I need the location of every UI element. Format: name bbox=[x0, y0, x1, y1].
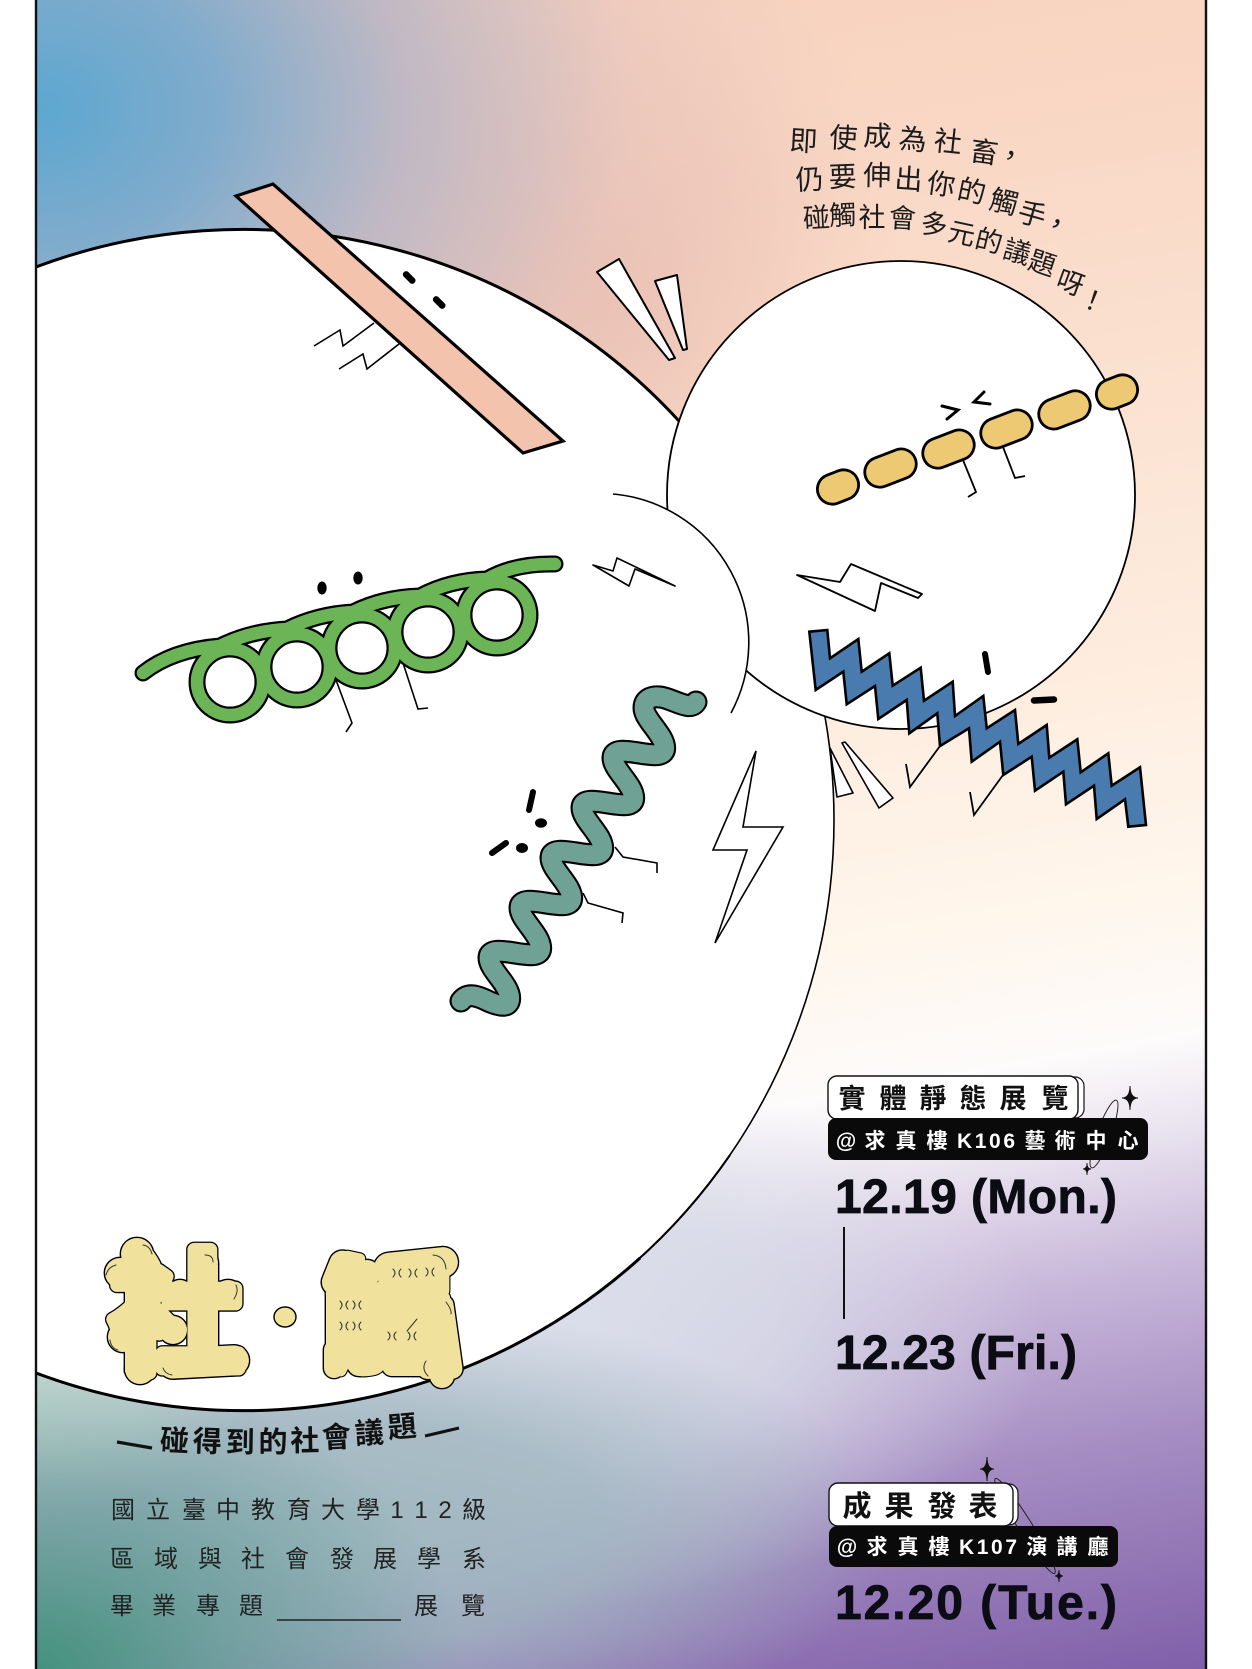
exhibition heading box bbox=[828, 1076, 1084, 1119]
yellow sausages bbox=[813, 370, 1142, 509]
presentation date: 12.20 (Tue.) bbox=[835, 1577, 1117, 1630]
green coil bbox=[143, 564, 555, 715]
physical exhibition block bbox=[828, 1076, 1148, 1380]
exhibition venue box: K106 bbox=[957, 1130, 1015, 1153]
presentation block bbox=[829, 1457, 1118, 1630]
pink bar eyes bbox=[402, 270, 447, 310]
organiser line 2: 區域與社會發展學系 bbox=[110, 1546, 486, 1573]
organiser blank line bbox=[277, 1619, 401, 1621]
exhibition venue box bbox=[828, 1118, 1148, 1160]
teal legs bbox=[583, 847, 657, 923]
presentation heading box: 成果發表 bbox=[842, 1490, 998, 1523]
blue zigzag character bbox=[809, 630, 1146, 827]
exhibition venue box: 藝術中心 bbox=[1024, 1130, 1138, 1153]
blue zigzag bbox=[809, 630, 1146, 827]
organiser line 1: 國立臺中教育大學112級 bbox=[111, 1497, 486, 1524]
blue eyes bbox=[985, 654, 1054, 700]
subtitle right dash bbox=[425, 1428, 459, 1436]
green coil character bbox=[143, 564, 555, 732]
organiser line 3 end: 展覽 bbox=[414, 1593, 485, 1620]
teal wave bbox=[461, 697, 696, 1005]
blue legs bbox=[906, 746, 1003, 815]
title character 觸: 觸 bbox=[329, 1250, 451, 1386]
pink bar character bbox=[236, 184, 563, 453]
title character 觸: 觸 bbox=[329, 1250, 451, 1386]
right white circle bbox=[667, 261, 1135, 729]
date start: 12.19 (Mon.) bbox=[835, 1171, 1117, 1224]
yellow eyes bbox=[942, 392, 990, 419]
title 社·觸 bbox=[105, 1238, 464, 1389]
presentation venue box: K107 bbox=[959, 1536, 1017, 1559]
tagline text: 碰觸社會多元的議題呀！ bbox=[802, 200, 1110, 320]
title character 社: 社 bbox=[111, 1242, 243, 1389]
presentation venue box: @求真樓 bbox=[837, 1536, 950, 1559]
green legs bbox=[336, 663, 428, 732]
title dot bbox=[274, 1307, 296, 1327]
yellow legs bbox=[963, 447, 1025, 497]
subtitle text: 碰得到的社會議題 bbox=[159, 1411, 418, 1460]
presentation venue box bbox=[829, 1526, 1118, 1567]
tagline text: 仍要伸出你的觸手， bbox=[795, 160, 1074, 243]
pink bar bbox=[236, 184, 563, 453]
large centre bolt bbox=[713, 751, 783, 943]
three white character circles bbox=[0, 229, 1135, 1411]
date connector line bbox=[843, 1227, 845, 1319]
yellow sausage character bbox=[813, 370, 1142, 509]
presentation venue box: 演講廳 bbox=[1026, 1535, 1108, 1559]
presentation heading box bbox=[829, 1483, 1018, 1526]
subtitle bbox=[117, 1411, 459, 1460]
title character 社: 社 bbox=[111, 1242, 243, 1389]
organiser text bbox=[110, 1497, 486, 1620]
right bolt bbox=[797, 564, 922, 611]
date end: 12.23 (Fri.) bbox=[835, 1327, 1077, 1380]
pink bar legs bbox=[314, 323, 399, 369]
organiser line 3: 畢業專題 bbox=[110, 1593, 263, 1620]
sparkle decoration 2 bbox=[980, 1457, 1063, 1582]
exhibition heading box: 實體靜態展覽 bbox=[838, 1084, 1068, 1114]
subtitle left dash bbox=[117, 1442, 152, 1448]
teal wave character bbox=[461, 697, 696, 1005]
small bolt bbox=[593, 558, 675, 586]
shards near top bbox=[597, 259, 687, 360]
tagline text: 即使成為社畜， bbox=[789, 120, 1027, 174]
title sparkle marks bbox=[340, 1268, 434, 1340]
green eyes bbox=[317, 572, 363, 594]
teal eyes bbox=[492, 792, 547, 853]
lower shards bbox=[830, 742, 893, 808]
exhibition venue box: @求真樓 bbox=[836, 1130, 948, 1153]
tagline text bbox=[789, 120, 1110, 320]
middle white circle bbox=[612, 493, 750, 714]
big white circle bbox=[0, 229, 834, 1411]
sparkle decoration 1 bbox=[1083, 1086, 1138, 1175]
